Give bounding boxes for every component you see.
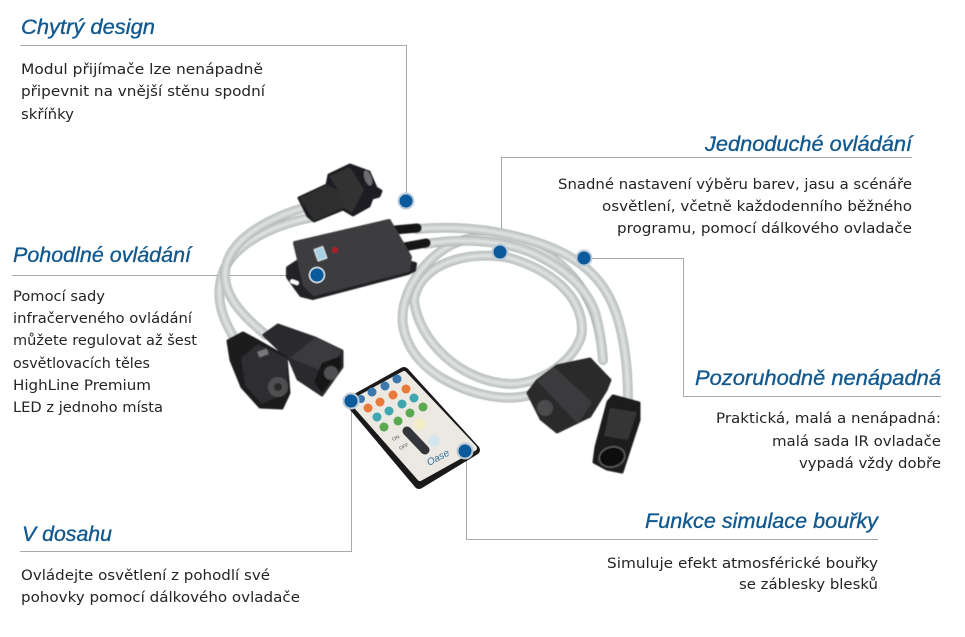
body text: Snadné nastavení výběru barev, jasu a scénáře [558,176,912,193]
heading: Pohodlné ovládání [13,243,193,267]
heading: Jednoduché ovládání [704,132,914,156]
body text: můžete regulovat až šest [13,332,197,349]
body text: Praktická, malá a nenápadná: [716,410,941,427]
body text [13,288,197,416]
panel: Funkce simulace bouřky [607,509,879,593]
hotspot markers [310,194,592,458]
product: cables [219,208,628,400]
body text [716,410,941,472]
body text: Modul přijímače lze nenápadně [21,61,263,78]
body text: LED z jednoho místa [13,399,163,416]
body text: malá sada IR ovladače [772,433,941,450]
body text: skříňky [21,106,74,123]
product: receiver module [288,221,426,298]
remote buttons: ON [391,434,401,443]
body text: osvětlení, včetně každodenního běžného [602,198,912,215]
heading: Pozoruhodně nenápadná [695,366,941,390]
body text: připevnit na vnější stěnu spodní [21,83,266,100]
panel: Chytrý design [21,15,266,123]
product: left connectors [228,325,342,408]
body text: infračerveného ovládání [13,310,193,327]
body text: vypadá vždy dobře [799,455,941,472]
leader lines [12,46,941,552]
body text [558,176,912,237]
body text: Pomocí sady [13,288,105,305]
body text: se záblesky blesků [739,576,878,593]
panel: Pozoruhodně nenápadná [695,366,941,472]
heading: V dosahu [22,522,112,546]
remote buttons: OFF [398,442,410,452]
product: top connector [299,165,381,221]
panel: Jednoduché ovládání [558,132,914,237]
remote buttons: Oase [425,448,452,469]
product: remote control [350,372,475,484]
body text: pohovky pomocí dálkového ovladače [21,589,300,606]
heading: Chytrý design [21,15,155,39]
body text: Ovládejte osvětlení z pohodlí své [21,567,270,584]
body text [607,555,878,593]
body text [21,567,300,606]
heading: Funkce simulace bouřky [645,509,879,533]
body text: osvětlovacích těles [13,355,150,372]
panel: V dosahu [21,522,300,606]
remote buttons [357,374,452,469]
panel: Pohodlné ovládání [13,243,197,416]
body text [21,61,266,123]
body text: Simuluje efekt atmosférické bouřky [607,555,878,572]
body text: programu, pomocí dálkového ovladače [617,220,912,237]
product: right connectors [528,359,639,472]
body text: HighLine Premium [13,377,151,394]
